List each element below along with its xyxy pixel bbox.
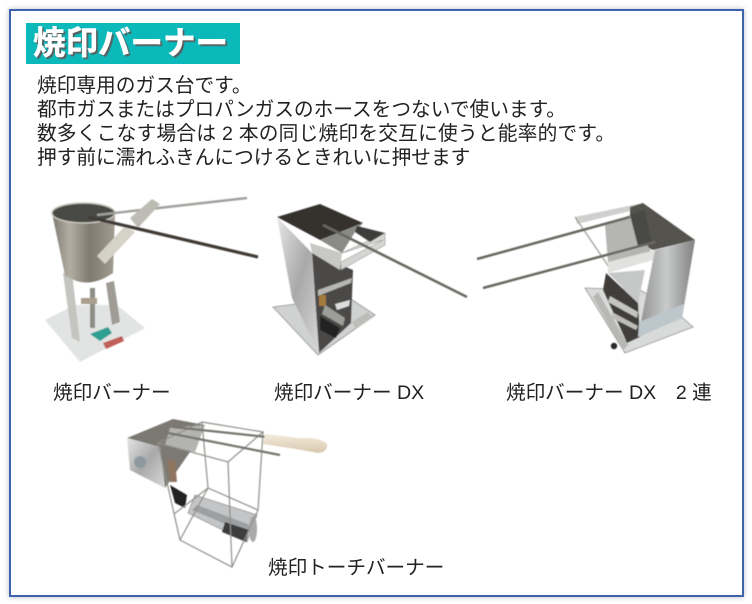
title banner: 焼印バーナー: [33, 25, 228, 61]
intro text block: 押す前に濡れふきんにつけるときれいに押せます: [37, 147, 470, 169]
label: burner: 焼印バーナー: [53, 382, 171, 404]
intro text block: 数多くこなす場合は 2 本の同じ焼印を交互に使うと能率的です。: [37, 123, 615, 145]
product: burner DX: [273, 204, 467, 355]
label: burner DX: 焼印バーナー DX: [274, 382, 424, 404]
product: burner: [45, 198, 258, 362]
label: burner DX twin: 焼印バーナー DX 2 連: [506, 382, 712, 404]
label: torch burner: 焼印トーチバーナー: [268, 557, 444, 579]
product: burner DX twin: [477, 203, 695, 353]
intro text block: 焼印専用のガス台です。: [37, 75, 252, 97]
intro text block: [37, 75, 615, 169]
intro text block: 都市ガスまたはプロパンガスのホースをつないで使います。: [37, 99, 566, 121]
product: torch burner: [127, 419, 327, 567]
